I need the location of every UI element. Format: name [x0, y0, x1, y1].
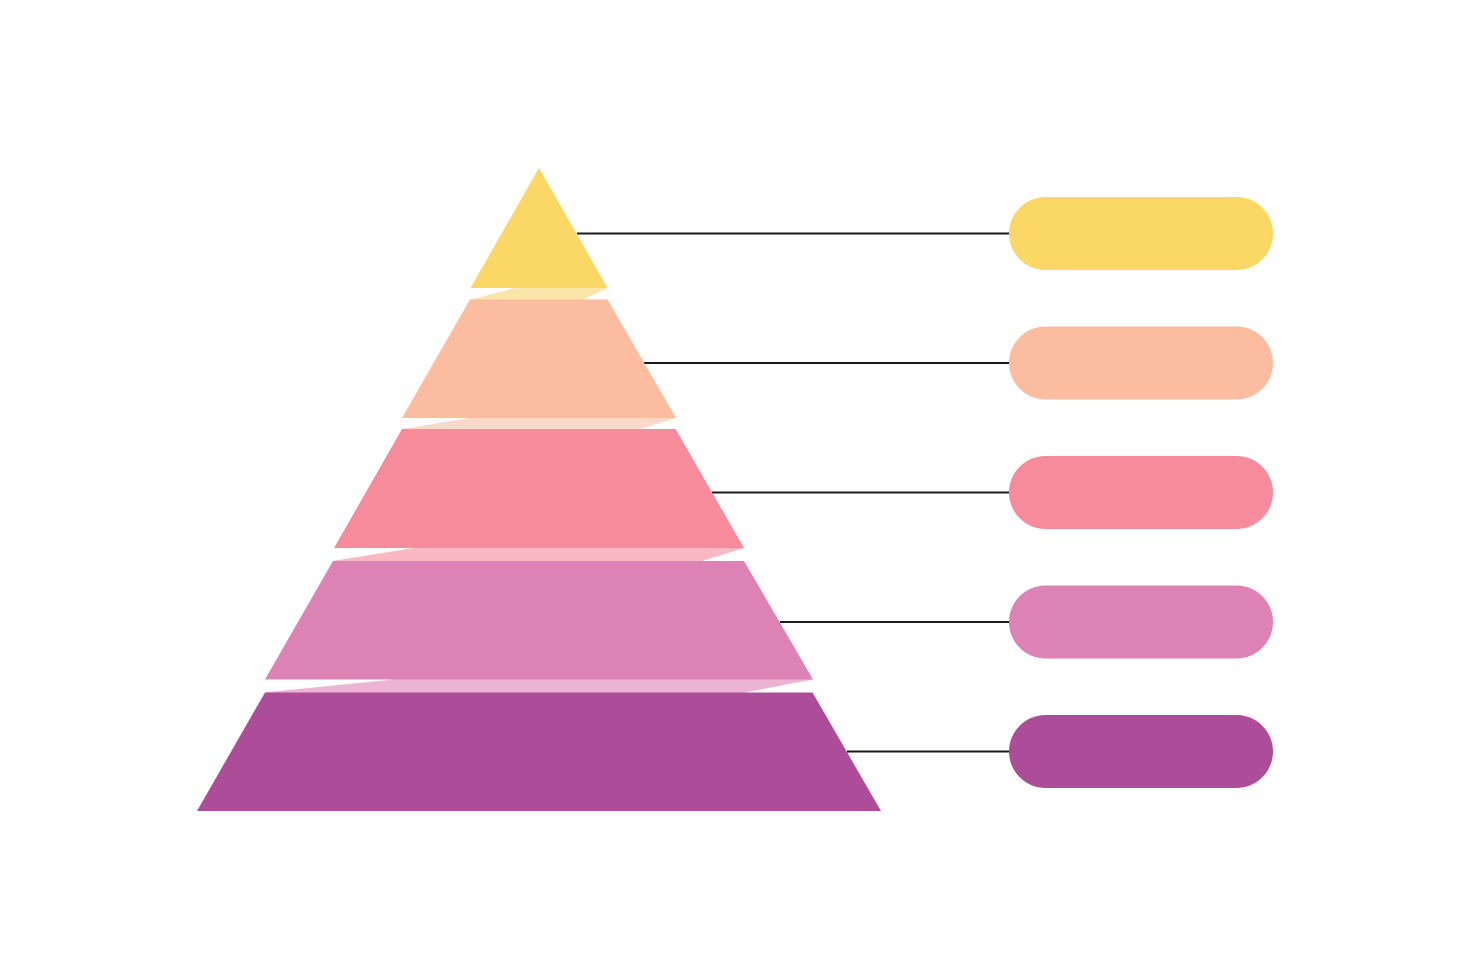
connector lines [577, 234, 1010, 752]
pyramid [197, 168, 881, 811]
gap shade: pink to orchid [333, 548, 744, 561]
label pill: purple [1009, 715, 1273, 788]
label pill: peach [1009, 326, 1273, 400]
gap shade: orchid to purple [264, 680, 813, 692]
gap shade: yellow to peach [471, 288, 608, 300]
tier 2: peach [402, 300, 676, 418]
label pill: pink [1009, 456, 1273, 529]
tier 1: yellow [470, 168, 608, 288]
tier 3: pink [334, 429, 744, 548]
tier 5: purple [197, 692, 881, 811]
tier 4: orchid [265, 561, 813, 680]
label pill: orchid [1009, 586, 1273, 658]
label pill: yellow [1009, 197, 1273, 270]
gap shade: peach to pink [402, 418, 676, 429]
